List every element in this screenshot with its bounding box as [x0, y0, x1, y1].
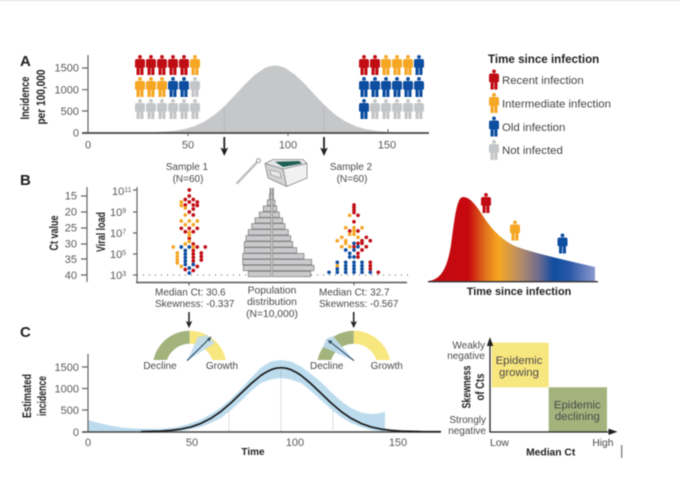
icon: PCR machine: [265, 160, 307, 186]
quadrant chart: epidemic phase: Low: [490, 438, 509, 449]
box: epidemic growing: Epidemic: [496, 355, 543, 367]
gauge: sample 1 growth: Growth: [206, 361, 238, 372]
chart: estimated incidence curve: 150: [389, 437, 407, 449]
axis: viral load: 9: [122, 208, 126, 215]
legend: time since infection: Recent infection: [502, 75, 584, 87]
axis: viral load: 10: [112, 186, 124, 198]
chart: incidence bell curve: 1500: [55, 63, 79, 75]
quadrant chart: epidemic phase: Weakly: [452, 340, 485, 351]
axis: viral load: 5: [122, 250, 126, 257]
chart: estimated incidence curve: [55, 354, 441, 458]
axis: viral load: 3: [122, 271, 126, 278]
legend: time since infection: Old infection: [502, 122, 565, 134]
y axis label: incidence per 100,000: [18, 69, 48, 124]
axis: viral load: 10: [110, 207, 122, 219]
arrow: sample 1 down: [220, 137, 228, 156]
chart: incidence bell curve: 100: [279, 139, 297, 151]
axis: Ct value: 15: [65, 190, 77, 202]
heading: panel A: A: [20, 53, 31, 70]
quadrant chart: epidemic phase: Strongly: [449, 415, 486, 426]
arrow: sample 2 to gauge: [350, 312, 357, 328]
label: sample 2: (N=60): [337, 174, 367, 185]
box: epidemic growing: [492, 343, 549, 387]
quadrant chart: epidemic phase: Median Ct: [526, 448, 576, 459]
text: population distribution label: [246, 286, 298, 320]
legend: time since infection: Intermediate infection: [502, 98, 611, 110]
axis: viral load: 10: [110, 249, 122, 261]
axis: viral load: 10: [110, 228, 122, 240]
arrow: sample 2 down: [320, 137, 328, 156]
gauge: sample 1 growth: Decline: [143, 361, 177, 372]
axis: Ct value: Ct value: [47, 215, 61, 250]
label: sample 2: [330, 162, 373, 185]
chart: incidence bell curve: 1000: [55, 84, 79, 96]
legend: time since infection: [488, 53, 611, 160]
quadrant chart: epidemic phase: Skewness: [460, 365, 474, 408]
axis: Ct value: [47, 187, 87, 282]
box: epidemic declining: Epidemic: [554, 399, 601, 411]
gauge: sample 1 growth: [143, 331, 238, 372]
gauge: sample 2 decline: Growth: [371, 361, 403, 372]
gauge: sample 2 decline: Decline: [310, 361, 344, 372]
chart: incidence bell curve: 500: [61, 106, 79, 118]
text: sample 2 statistics: Skewness: -0.567: [319, 299, 399, 310]
box: epidemic declining: [549, 387, 607, 432]
quadrant chart: epidemic phase: of Cts: [473, 373, 487, 400]
chart: estimated incidence curve: 1000: [55, 384, 79, 396]
y axis label: incidence per 100,000: per 100,000: [34, 69, 48, 124]
axis: Ct value: 25: [65, 222, 77, 234]
chart: incidence bell curve: 0: [85, 139, 91, 151]
dot plot: sample 1: [173, 190, 205, 273]
heading: panel B: B: [20, 172, 31, 189]
dot plot: sample 2: [329, 205, 378, 272]
chart: estimated incidence curve: 500: [61, 405, 79, 417]
quadrant chart: epidemic phase: [447, 337, 618, 459]
label: sample 2: Sample 2: [330, 162, 373, 173]
label: sample 1: Sample 1: [166, 162, 209, 173]
text: sample 2 statistics: Median Ct: 32.7: [319, 288, 390, 299]
heading: panel C: C: [20, 324, 31, 341]
quadrant chart: epidemic phase: negative: [447, 351, 485, 362]
text: population distribution label: Population: [248, 286, 297, 296]
axis: viral load: [94, 186, 411, 286]
icon: swab: [237, 159, 260, 184]
axis: Ct value: 40: [65, 270, 77, 282]
chart: estimated incidence curve: 0: [73, 427, 79, 439]
chart: estimated incidence curve: 1500: [55, 362, 79, 374]
chart: estimated incidence curve: Time: [241, 447, 265, 458]
text: sample 1 statistics: Median Ct: 30.6: [155, 288, 226, 299]
icons: sample 2 population grid: [359, 55, 424, 119]
chart: incidence bell curve: 150: [378, 139, 396, 151]
y axis label: estimated incidence: incidence: [35, 376, 49, 416]
axis: Ct value: 35: [65, 254, 77, 266]
y axis label: estimated incidence: Estimated: [20, 374, 34, 418]
text: sample 1 statistics: [155, 288, 235, 310]
chart: estimated incidence curve: 100: [286, 437, 304, 449]
legend: time since infection: Time since infection: [488, 53, 599, 66]
label: sample 1: [166, 162, 209, 185]
axis: Ct value: 20: [65, 206, 77, 218]
icons: sample 1 population grid: [135, 55, 200, 119]
chart: incidence bell curve: 50: [182, 139, 194, 151]
label: sample 1: (N=60): [173, 174, 203, 185]
axis: viral load: 11: [124, 187, 132, 194]
box: epidemic growing: growing: [499, 367, 539, 379]
axis: viral load: 10: [110, 270, 122, 282]
quadrant chart: epidemic phase: High: [592, 438, 614, 449]
y axis label: incidence per 100,000: Incidence: [18, 76, 32, 120]
chart: viral load over time since infection: Time since infection: [467, 286, 571, 298]
text: population distribution label: distribution: [247, 297, 297, 308]
quadrant chart: epidemic phase: negative: [448, 426, 486, 437]
chart: estimated incidence curve: 0: [85, 437, 91, 449]
arrow: sample 1 to gauge: [186, 312, 192, 328]
axis: viral load: Viral load: [94, 212, 108, 252]
chart: population distribution: [243, 188, 314, 277]
gauge: sample 2 decline: [310, 331, 403, 372]
y axis label: estimated incidence: [20, 374, 49, 418]
chart: estimated incidence curve: 50: [186, 437, 198, 449]
legend: time since infection: Not infected: [502, 145, 563, 157]
text: sample 2 statistics: [319, 288, 399, 310]
text: population distribution label: (N=10,000): [246, 309, 298, 320]
text: sample 1 statistics: Skewness: -0.337: [155, 299, 235, 310]
chart: incidence bell curve: [55, 55, 429, 151]
chart: viral load over time since infection: [428, 193, 598, 298]
axis: Ct value: 30: [65, 238, 77, 250]
axis: viral load: 7: [122, 229, 126, 236]
chart: incidence bell curve: 0: [73, 128, 79, 140]
box: epidemic declining: declining: [555, 411, 600, 423]
